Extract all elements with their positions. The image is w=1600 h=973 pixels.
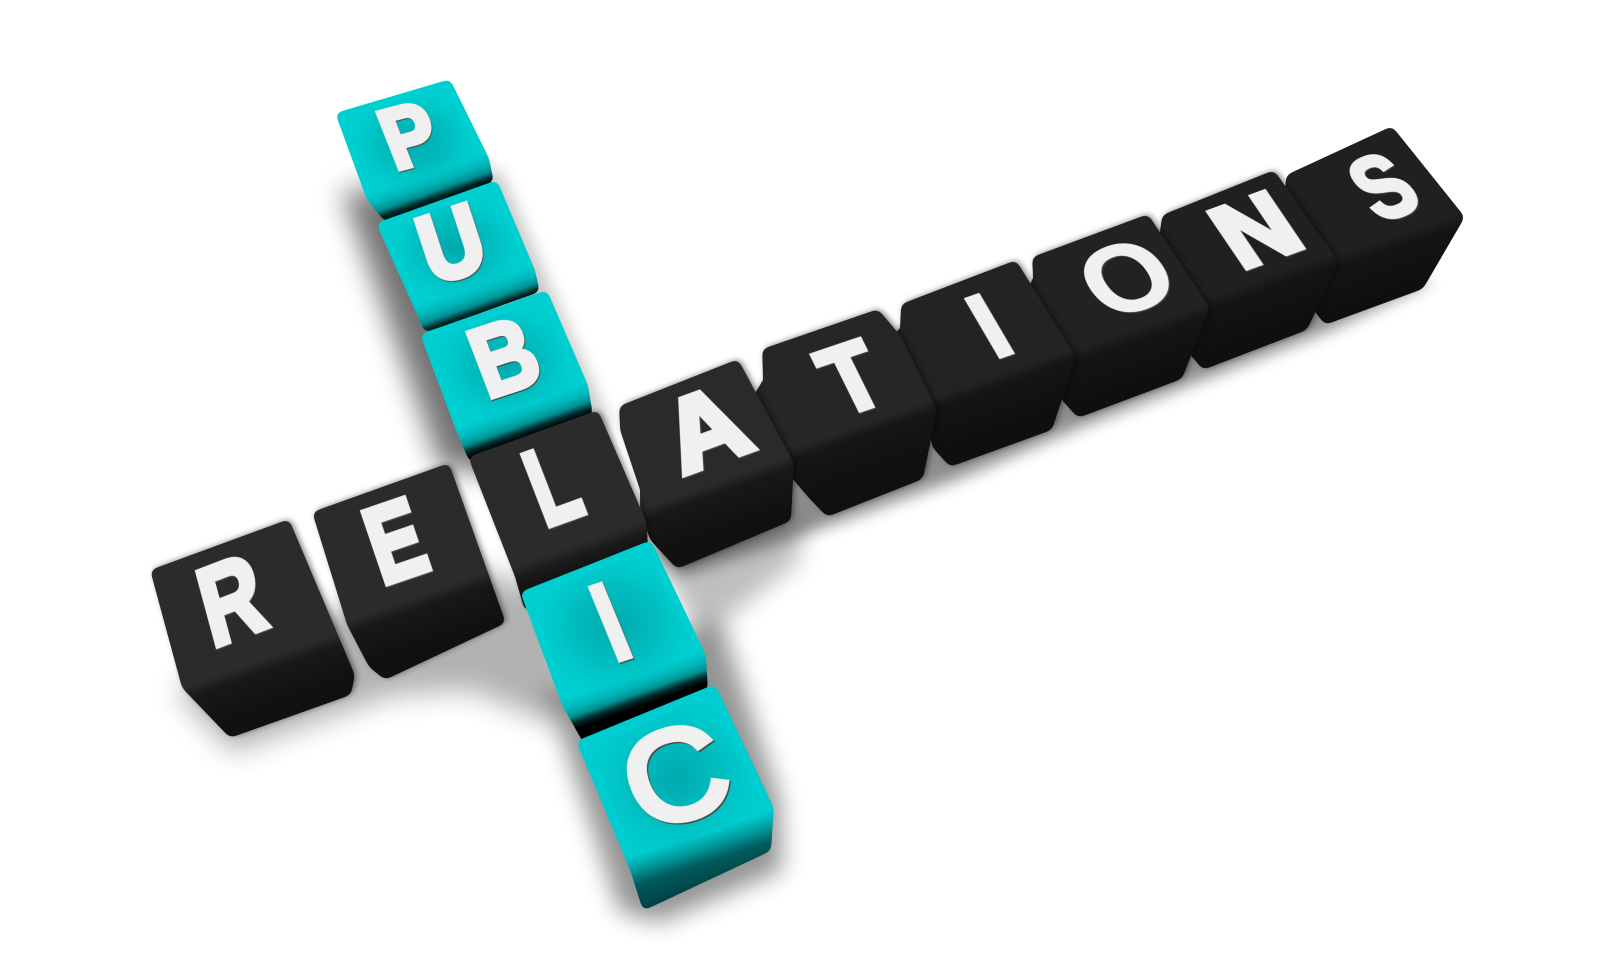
block: A (619, 359, 794, 569)
letter S: S (1328, 133, 1438, 241)
block: B (420, 290, 593, 463)
letter R: R (186, 530, 277, 672)
block: L (468, 410, 648, 612)
letter P: P (366, 84, 452, 188)
block: O (1025, 214, 1210, 418)
block: I (public) (520, 540, 708, 746)
block: N (1150, 170, 1339, 370)
letter B: B (454, 294, 554, 419)
block: R (150, 519, 355, 738)
letter N: N (1191, 172, 1320, 287)
letter I: I (947, 272, 1032, 379)
block: P (335, 79, 494, 222)
block: E (312, 463, 506, 680)
shadows under the blocks (175, 170, 1430, 922)
letter T: T (803, 322, 900, 435)
letter I (public): I (572, 557, 649, 688)
block: I (885, 260, 1076, 467)
block: C (576, 684, 774, 911)
block: T (752, 309, 937, 517)
letter A: A (644, 362, 766, 495)
block: S (1280, 126, 1465, 325)
letter E: E (351, 475, 440, 608)
block: U (376, 180, 540, 333)
letter U: U (405, 183, 498, 305)
letter O: O (1054, 215, 1200, 341)
letter L: L (510, 420, 596, 549)
letter C: C (602, 694, 749, 858)
